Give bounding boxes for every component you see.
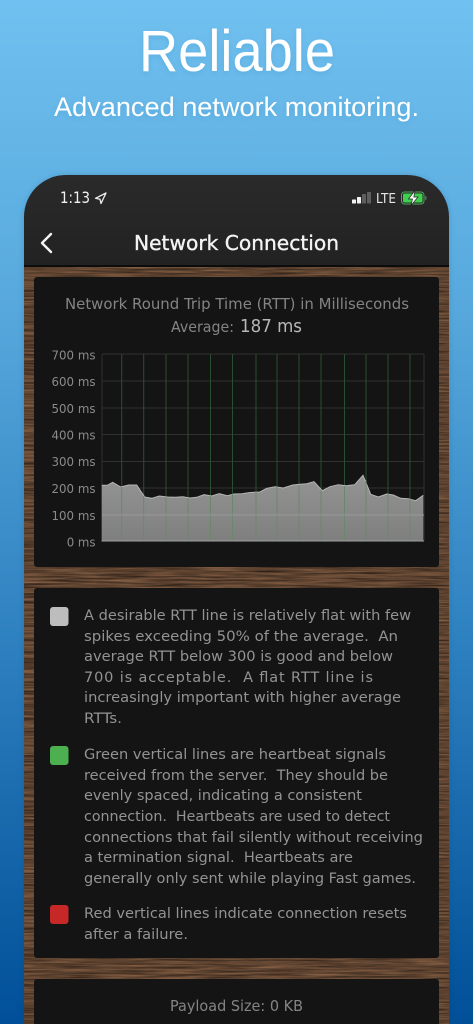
y axis labels: 100 ms [52,508,96,523]
description text: heartbeats: connection. Heartbeats are used to detect [84,809,390,825]
icon: green swatch [50,746,68,765]
y axis labels: 0 ms [67,534,96,550]
icon: back chevron [42,234,51,252]
wood background [24,266,449,1024]
description text: RTT line: average RTT below 300 is good and below [84,649,393,665]
description text: RTT line: increasingly important with higher average [84,690,401,706]
y axis labels: 600 ms [52,374,96,389]
description text: heartbeats: received from the server. They should be [84,768,388,784]
y axis labels: 300 ms [52,454,96,469]
title: Reliable [139,19,335,84]
status bar time: 1:13 [60,188,90,207]
subtitle: Advanced network monitoring. [54,92,419,122]
description text: RTT line: RTTs. [84,711,122,727]
description text: resets [84,907,406,939]
description text: RTT line: A desirable RTT line is relatively flat with few [84,608,411,624]
legend item: red reset lines [50,905,406,939]
description text: heartbeats: connections that fail silently without receiving [84,830,423,846]
description text: heartbeats: evenly spaced, indicating a consistent [84,788,362,804]
description text: heartbeats: a termination signal. Heartbeats are [84,850,353,866]
average value: 187 ms [240,317,302,337]
description text: RTT line: 700 is acceptable. A flat RTT line is [84,670,373,686]
icon: charging battery [401,192,426,204]
average label: Average: [171,318,234,336]
y axis labels: 400 ms [52,428,96,442]
icon: location arrow [96,193,106,204]
y axis labels: 200 ms [52,481,96,496]
phone mockup [24,175,449,1024]
description text: heartbeats [84,747,423,887]
icon: signal bars [352,192,371,204]
panel: payload size [34,979,439,1024]
legend item: grey RTT line [50,607,411,727]
legend item: green heartbeat lines [50,746,423,887]
line chart: RTT [102,354,424,541]
description text: RTT line: spikes exceeding 50% of the average. An [84,629,398,645]
icon: grey swatch [50,607,68,626]
description text: resets: Red vertical lines indicate connection resets [84,906,407,922]
description text: resets: after a failure. [84,927,188,943]
icon: red swatch [50,905,68,924]
y axis labels: 700 ms [52,348,96,362]
y axis labels: 500 ms [52,401,96,416]
chart heading: Network Round Trip Time (RTT) in Milliseconds [65,295,409,313]
description text: RTT line [84,608,411,727]
description text: heartbeats: generally only sent while playing Fast games. [84,871,416,887]
panel: legend [34,588,439,958]
screen title: Network Connection [134,231,339,255]
network type label: LTE [376,192,396,207]
description text: heartbeats: Green vertical lines are heartbeat signals [84,747,386,763]
panel: RTT chart [34,277,439,567]
y axis labels [52,348,96,550]
payload size label: Payload Size: 0 KB [170,997,303,1015]
app header bar [24,175,449,267]
